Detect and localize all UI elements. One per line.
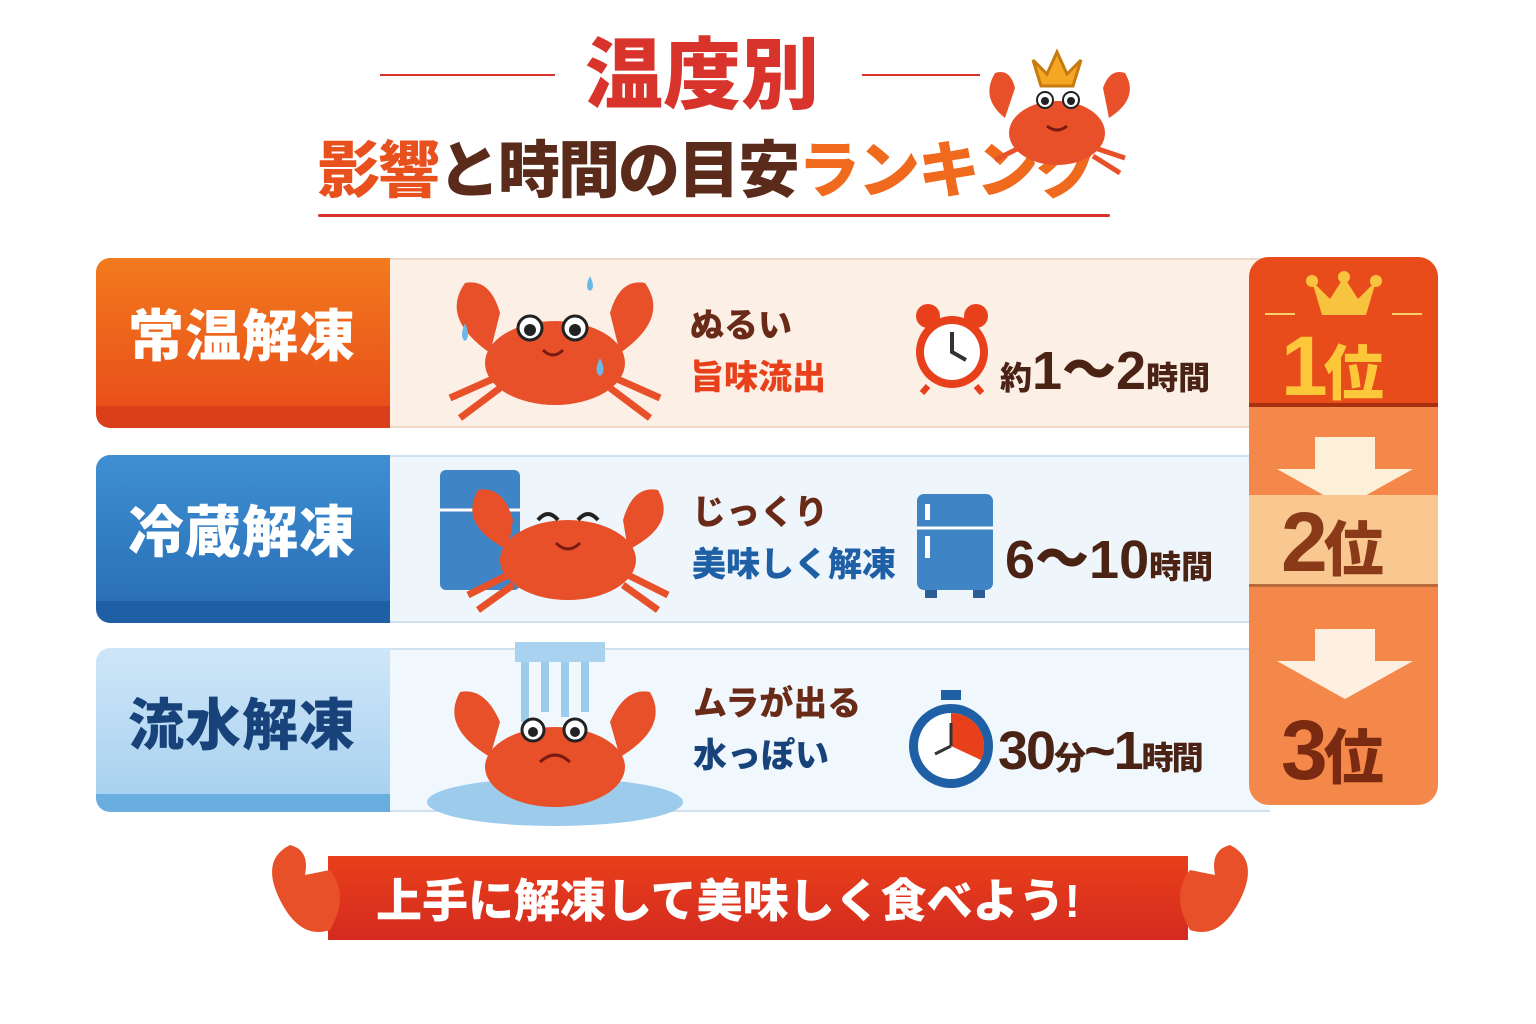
time: 約1〜2時間: 約1〜2時間 (1000, 341, 1210, 401)
arrow down 1 (1277, 437, 1413, 495)
text: ぬるい 旨味流出: ぬるい (690, 307, 792, 345)
title (318, 31, 1110, 217)
icon: fridge (917, 494, 993, 598)
rank 2: 2位 (1281, 495, 1384, 589)
icon: crab under water (427, 642, 683, 826)
label: 常温解凍 (96, 258, 392, 428)
row 2: 冷蔵解凍 (96, 455, 1249, 623)
label: 常温解凍: 常温解凍 (128, 304, 356, 368)
bottom banner (272, 845, 1248, 940)
label: 流水解凍: 流水解凍 (128, 694, 356, 756)
icon: alarm clock (916, 304, 988, 395)
panel: row 3 content (390, 648, 1270, 812)
text: ぬるい 旨味流出 (690, 307, 826, 397)
icon: stopwatch (909, 690, 993, 788)
rank 3: 3位 (1281, 703, 1384, 797)
title: 温度別 (585, 31, 819, 119)
text: ムラが出る 水っぽい: ムラが出る (693, 685, 861, 723)
label: 冷蔵解凍 (96, 455, 392, 623)
rank column (1249, 257, 1438, 805)
arrow down 2 (1277, 629, 1413, 699)
text: じっくり 美味しく解凍 (692, 494, 896, 584)
panel: row 2 content (390, 455, 1270, 623)
bottom banner: 上手に解凍して美味しく食べよう! (376, 875, 1080, 927)
icon: claw right (1180, 845, 1248, 932)
icon: sweating crab (448, 276, 662, 421)
rank 1: 1位 (1281, 319, 1384, 413)
row 3: 流水解凍 (96, 642, 1270, 826)
text: じっくり 美味しく解凍: 美味しく解凍 (692, 546, 896, 584)
label: 冷蔵解凍: 冷蔵解凍 (128, 500, 356, 564)
rank 2 (1249, 495, 1438, 587)
icon: fridge with crab (440, 470, 670, 613)
time: 6〜10時間: 6〜10時間 (1005, 530, 1213, 590)
text: ぬるい 旨味流出: 旨味流出 (690, 359, 826, 397)
icon: claw left (272, 845, 340, 932)
text: ムラが出る 水っぽい (693, 684, 861, 775)
time: 30分〜1時間: 30分~1時間 (998, 721, 1202, 781)
label: 流水解凍 (96, 648, 392, 812)
row 1: 常温解凍 (96, 258, 1262, 428)
text: じっくり 美味しく解凍: じっくり (692, 494, 828, 532)
panel: row 1 content (390, 258, 1270, 428)
rank 1 (1249, 257, 1438, 407)
text: ムラが出る 水っぽい: 水っぽい (693, 737, 829, 775)
title: 影響と時間の目安ランキング (318, 137, 1096, 206)
icon: crab with crown (989, 48, 1130, 176)
